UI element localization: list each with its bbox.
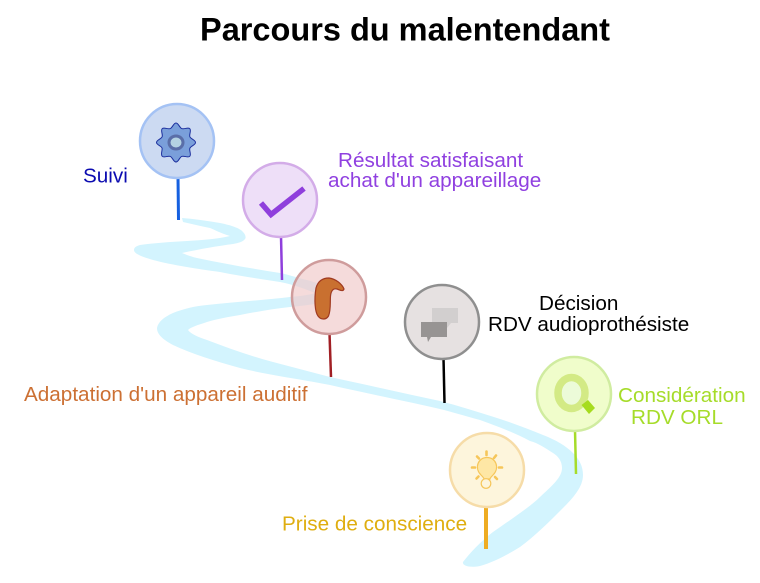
callout: consideration — [537, 357, 611, 474]
marker circle: suivi — [140, 104, 214, 178]
label: decision: Décision — [539, 292, 618, 315]
pin: decision — [444, 358, 445, 403]
callout: adaptation — [292, 260, 366, 377]
pin: consideration — [575, 430, 576, 474]
callout: resultat satisfaisant — [243, 163, 317, 280]
callout: prise de conscience — [450, 433, 524, 549]
winding road — [134, 218, 583, 567]
icon: gear — [156, 123, 196, 162]
label: resultat satisfaisant: achat d'un appareillage — [328, 169, 541, 192]
pin: resultat — [281, 236, 282, 280]
marker circle: prise de conscience — [450, 433, 524, 507]
icon: hearing aid — [315, 278, 344, 319]
label: consideration: RDV ORL — [631, 406, 723, 429]
icon: speech bubbles — [421, 308, 458, 342]
icon: check mark — [261, 188, 304, 214]
pin: prise de conscience — [484, 505, 488, 549]
label: consideration: Considération — [618, 384, 746, 407]
icon: magnifier — [558, 378, 595, 414]
title: Parcours du malentendant — [200, 12, 610, 48]
label: decision: RDV audioprothésiste — [488, 313, 689, 336]
marker circle: consideration — [537, 357, 611, 431]
marker circle: resultat — [243, 163, 317, 237]
pin: adaptation — [330, 333, 331, 377]
marker circle: decision — [405, 285, 479, 359]
label: prise de conscience: Prise de conscience — [282, 512, 467, 536]
label: suivi: Suivi — [83, 164, 128, 188]
callout: decision — [405, 285, 479, 403]
label: resultat satisfaisant: Résultat satisfaisant — [338, 149, 523, 172]
callout: suivi — [140, 104, 214, 220]
pin: suivi — [176, 177, 180, 220]
label: adaptation: Adaptation d'un appareil auditif — [24, 383, 308, 406]
marker circle: adaptation — [292, 260, 366, 334]
icon: light bulb — [472, 452, 502, 488]
